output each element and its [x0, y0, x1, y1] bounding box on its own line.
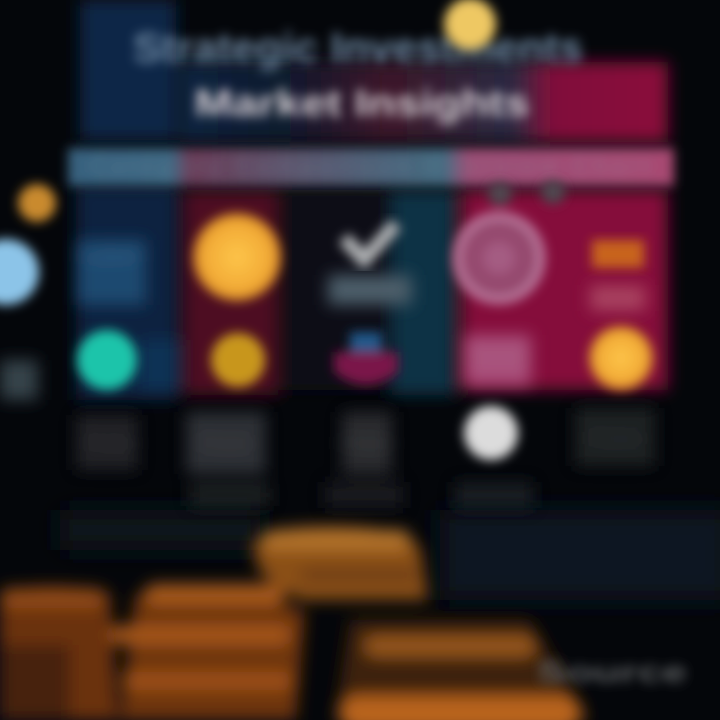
coin stack: back centre	[252, 526, 428, 600]
text blocks: lower labels	[76, 408, 655, 508]
icon: orange coin	[589, 326, 653, 390]
icon: gold circle	[211, 333, 265, 387]
text blocks: lower labels: Point	[341, 433, 391, 455]
icon: small orange circle	[18, 184, 56, 222]
header band: Category Comparison Overview Chart	[90, 153, 650, 180]
text blocks: column labels: Data	[591, 286, 640, 311]
header band	[68, 148, 674, 186]
panel: board backgrounds	[76, 0, 668, 400]
icon: white circle	[464, 406, 518, 460]
icon: blue and crimson shield	[334, 332, 398, 385]
text blocks: lower labels: Point	[590, 428, 640, 450]
coin stack: centre left	[110, 584, 305, 720]
icon: check mark	[344, 224, 396, 260]
icon: top yellow circle	[444, 0, 496, 50]
floor glow	[60, 510, 720, 600]
icon: light blue circle	[0, 239, 39, 305]
text blocks: column labels: Note	[467, 340, 529, 371]
title: Strategic Investments	[133, 24, 583, 71]
caption bottom right: Source	[537, 656, 687, 689]
icon: pink ring	[457, 180, 565, 300]
text blocks: column labels: Label	[81, 242, 139, 267]
coin stacks	[0, 526, 590, 720]
title: Market Insights	[194, 83, 530, 125]
coin stack: right	[335, 620, 590, 720]
text blocks: lower labels: Point	[85, 433, 135, 455]
coin stack: left	[0, 586, 118, 720]
text blocks: column labels: Details	[334, 276, 406, 301]
icon: teal circle	[77, 330, 137, 390]
icon: orange badge	[592, 240, 644, 268]
title	[133, 24, 583, 125]
text blocks: column labels	[0, 240, 646, 400]
text blocks: lower labels: Point	[200, 433, 250, 455]
icon: large gold circle	[193, 213, 281, 301]
